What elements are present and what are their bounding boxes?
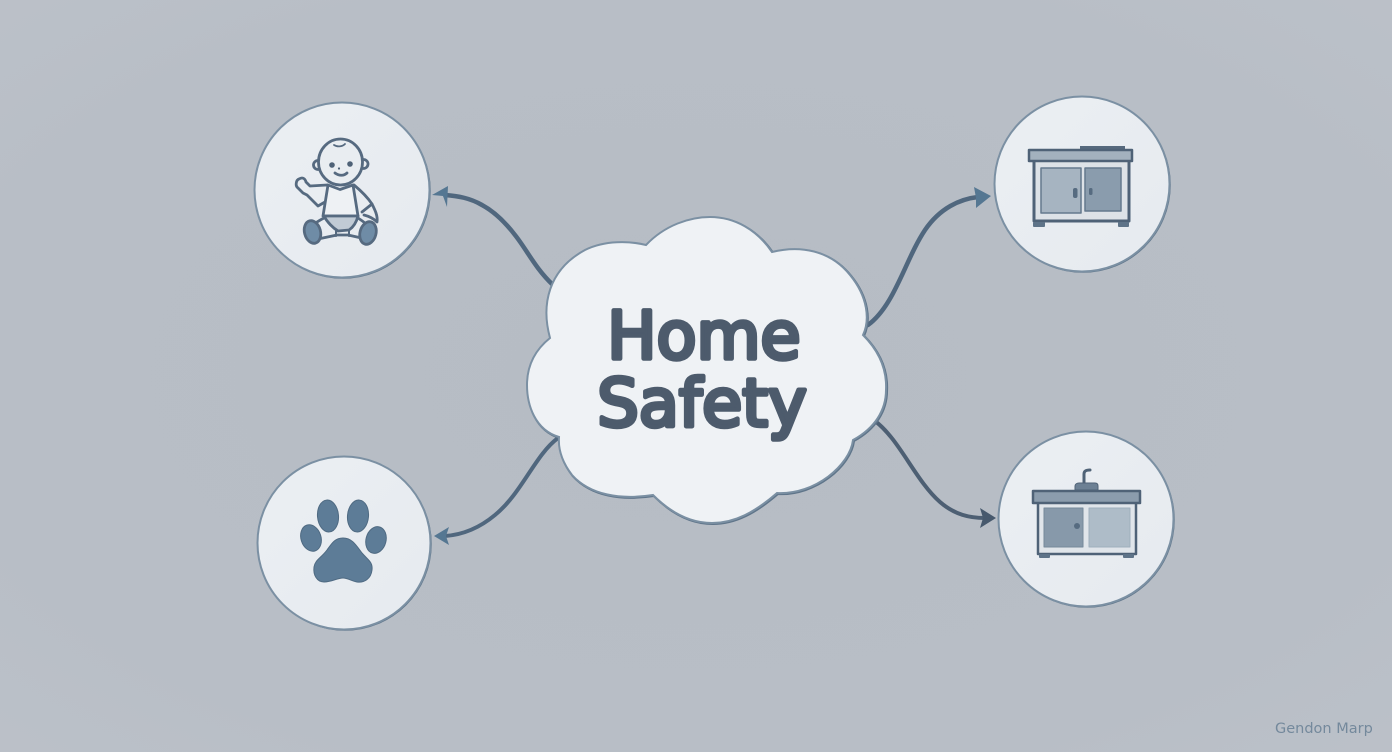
panel: baby circle <box>254 102 431 279</box>
heading: Home Safety: Home <box>607 298 801 374</box>
panel: upper cabinet circle <box>994 96 1171 273</box>
arrow: cloud to sink <box>875 421 996 528</box>
icon: cabinet <box>1029 146 1132 227</box>
heading: Home Safety <box>597 298 807 442</box>
watermark: Gendon Marp: Gendon Marp <box>1275 721 1373 737</box>
arrow: cloud to paw <box>434 438 558 545</box>
arrow: cloud to baby <box>432 186 553 285</box>
icon: sink cabinet <box>1033 470 1140 558</box>
panel: paw circle <box>258 456 432 631</box>
panel: sink circle <box>998 432 1175 608</box>
icon: baby <box>296 139 379 246</box>
arrow: cloud to upper cabinet <box>868 187 991 325</box>
icon: paw print <box>297 499 389 582</box>
heading: Home Safety: Safety <box>597 366 807 442</box>
panel: central cloud <box>527 217 887 524</box>
